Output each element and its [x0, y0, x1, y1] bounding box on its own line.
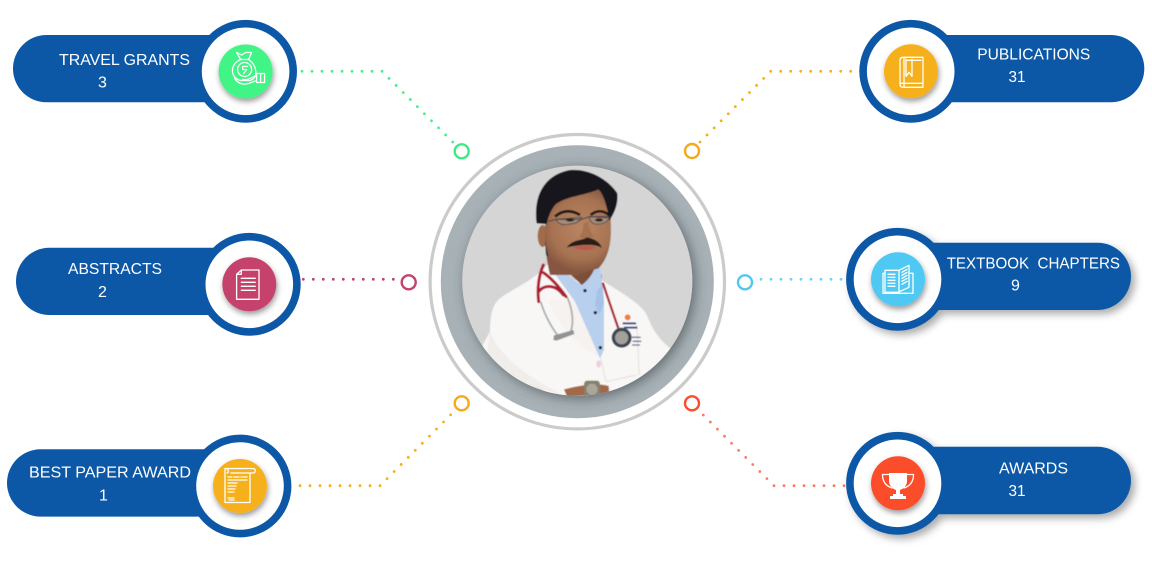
- label: abstracts: ABSTRACTS: [68, 261, 162, 278]
- central portrait: [430, 135, 724, 429]
- portrait photo of doctor: [482, 169, 692, 396]
- label: best paper award: BEST PAPER AWARD: [29, 465, 191, 482]
- connector: awards: [685, 396, 844, 486]
- connector: publications: [685, 71, 861, 158]
- icon: document: [222, 257, 276, 311]
- label: awards: AWARDS: [999, 461, 1068, 478]
- panel: best paper award: [7, 438, 288, 534]
- connector: abstracts: [303, 275, 416, 289]
- ring: abstracts: [202, 237, 297, 332]
- panel: awards: [850, 436, 1131, 531]
- panel: abstracts: [16, 237, 297, 332]
- value: publications: 31: [1008, 69, 1026, 86]
- connector: textbook chapters: [738, 275, 841, 289]
- shadowed pill and ring: [850, 436, 1131, 531]
- value: best paper award: 1: [99, 487, 108, 504]
- icon: money bag in hand: [219, 44, 273, 98]
- pill: best paper award: [7, 449, 247, 517]
- icon: trophy: [871, 456, 925, 510]
- connector: travel grants: [302, 71, 469, 158]
- ring: travel grants: [198, 24, 293, 119]
- ring: best paper award: [192, 438, 288, 534]
- value: textbook chapters: 9: [1011, 278, 1020, 295]
- value: awards: 31: [1008, 483, 1026, 500]
- label: publications: PUBLICATIONS: [977, 47, 1090, 64]
- connector: best paper award: [300, 396, 469, 486]
- pill: textbook chapters: [891, 243, 1131, 310]
- value: travel grants: 3: [98, 75, 107, 92]
- pill: abstracts: [16, 248, 256, 315]
- value: abstracts: 2: [98, 284, 107, 301]
- pill: travel grants: [13, 35, 253, 102]
- icon: certificate scroll: [213, 459, 267, 513]
- label: textbook chapters: TEXTBOOK CHAPTERS: [947, 255, 1120, 272]
- ring: textbook chapters: [850, 232, 945, 327]
- panel: textbook chapters: [850, 232, 1131, 327]
- label: travel grants: TRAVEL GRANTS: [59, 52, 190, 69]
- panel: publications: [863, 24, 1144, 119]
- panel: travel grants: [13, 24, 293, 119]
- shadowed pill and ring: [850, 232, 1131, 327]
- icon: book with bookmark: [884, 44, 938, 98]
- icon: open book: [871, 252, 925, 306]
- pill: awards: [891, 447, 1131, 514]
- pill: publications: [904, 35, 1144, 102]
- ring: publications: [863, 24, 958, 119]
- ring: awards: [850, 436, 945, 531]
